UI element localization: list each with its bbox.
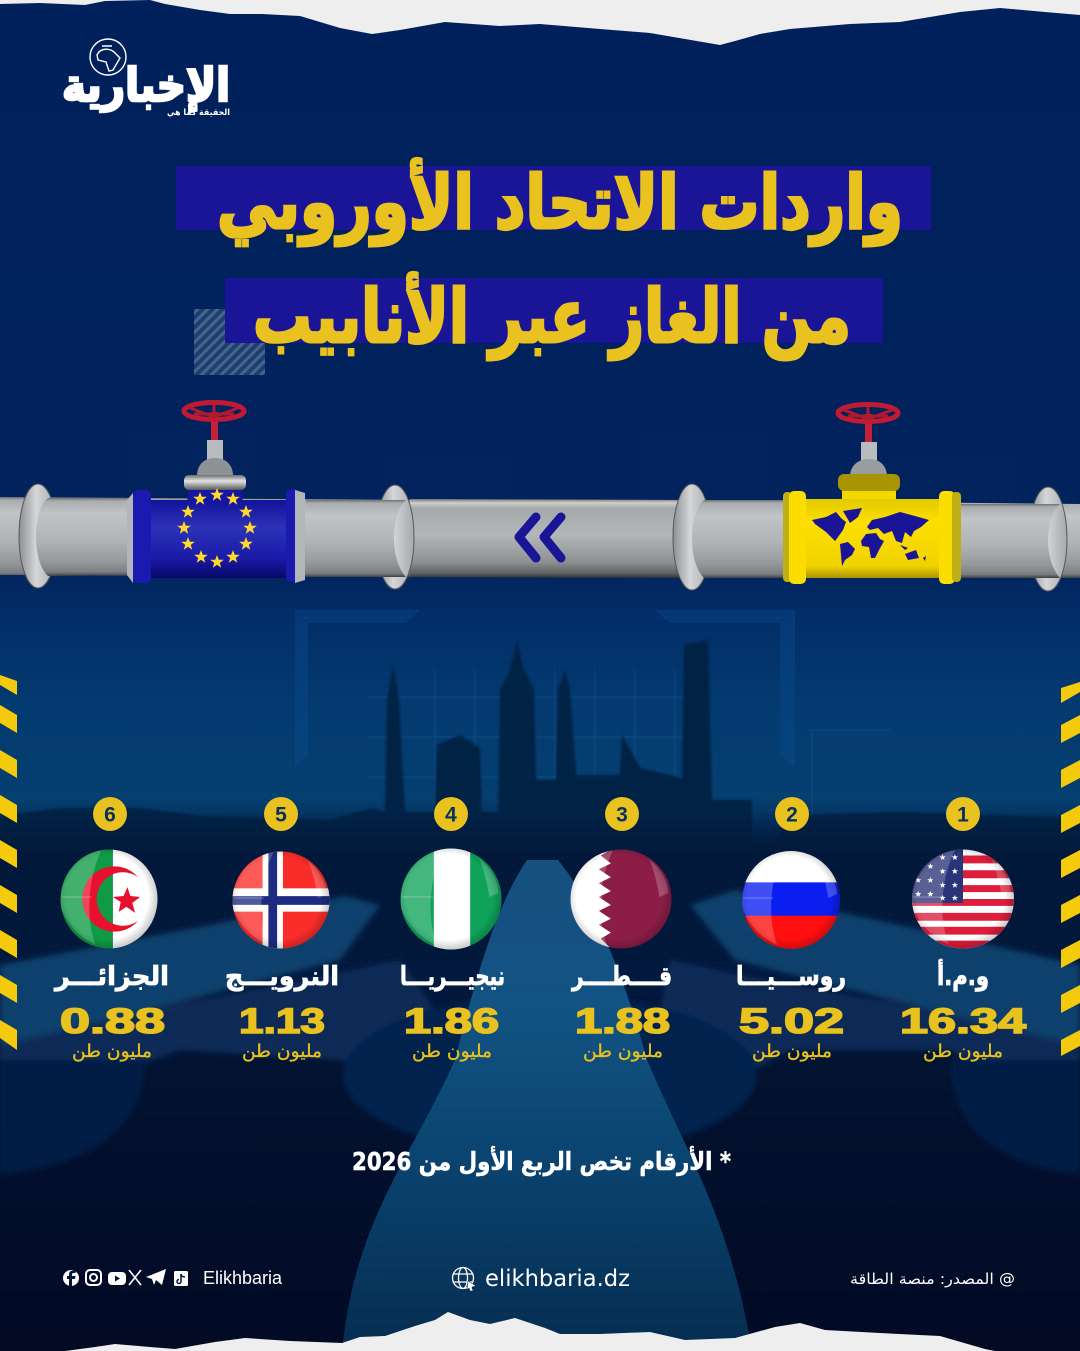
background: refinery silhouette [0,610,1080,962]
flag: USA [912,850,1014,948]
title [176,158,931,375]
title bar 2 [225,278,883,343]
rank badge [946,797,980,831]
logo wordmark: الإخبارية [62,58,230,112]
icon: instagram [86,1270,101,1285]
rank badge: 1 [957,804,969,826]
icon: globe with cursor [452,1268,476,1291]
unit: مليون طن [583,1041,663,1062]
unit: مليون طن [412,1041,492,1062]
website url: elikhbaria.dz [485,1266,630,1292]
hazard stripes: right [1061,682,1080,1056]
icon: globe [90,39,126,75]
country name: النرويـــج [225,962,339,992]
title line 1: واردات الاتحاد الأوروبي [217,158,903,247]
unit: مليون طن [923,1041,1003,1062]
title bar 1 [176,166,931,230]
rank badge: 6 [104,804,116,826]
torn paper: top [0,0,1080,45]
flag: Russia [742,851,840,949]
world map [812,508,929,566]
flag: Norway [232,852,330,948]
country name: روســـيـــا [736,962,846,992]
source: @ المصدر: منصة الطاقة [850,1270,1015,1288]
rank 4: Nigeria [400,797,505,1062]
logo [62,39,230,118]
valve: world map [783,404,961,584]
social handle: Elikhbaria [203,1268,283,1288]
arrow: double chevron [519,517,561,558]
rank badge [775,797,809,831]
title line 2: من الغاز عبر الأنابيب [253,272,851,360]
value: 1.88 [575,1002,670,1041]
country name: قــــطــــر [570,962,672,992]
rank badge [264,797,298,831]
rank badge [605,797,639,831]
rank badge: 2 [786,804,798,826]
pipe [0,497,1080,578]
unit: مليون طن [72,1041,152,1062]
value: 5.02 [739,1002,844,1041]
country name: الجزائـــر [53,962,169,992]
icon: X [129,1270,141,1285]
rank 1: United States [900,797,1027,1062]
rank badge: 4 [445,804,457,826]
logo tagline: الحقيقة كما هي [167,108,230,118]
unit: مليون طن [752,1041,832,1062]
flag: Nigeria [400,848,502,950]
country name: و.م.أ [937,959,989,992]
EU stars [177,488,257,568]
rank badge: 5 [275,804,287,826]
icon: facebook [63,1270,79,1286]
rank badge: 3 [616,804,628,826]
value: 1.13 [239,1002,325,1041]
footnote: * الأرقام تخص الربع الأول من 2026 [352,1146,731,1177]
rank badge [93,797,127,831]
flag: Qatar [570,850,672,948]
icon: youtube [108,1272,126,1285]
value: 0.88 [60,1002,165,1041]
unit: مليون طن [242,1041,322,1062]
website [452,1266,630,1292]
valve wheel [184,402,244,442]
valve: EU [127,402,305,583]
country name: نيجيـــريـــا [400,962,505,992]
rank badge [434,797,468,831]
value: 1.86 [404,1002,499,1041]
flag: Algeria [60,850,158,948]
rank 5: Norway [225,797,339,1062]
rank 3: Qatar [570,797,672,1062]
icon: tiktok [174,1271,188,1286]
icon: telegram [146,1269,166,1285]
pipe flanges [19,484,1067,591]
pipeline illustration [0,402,1080,591]
valve wheel [838,404,898,444]
rank 2: Russia [736,797,846,1062]
value: 16.34 [900,1002,1027,1041]
rank 6: Algeria [53,797,169,1062]
social icons [63,1269,188,1286]
hazard stripes: left [0,675,17,1050]
hatch block [194,309,265,375]
torn paper: bottom [65,1312,995,1351]
